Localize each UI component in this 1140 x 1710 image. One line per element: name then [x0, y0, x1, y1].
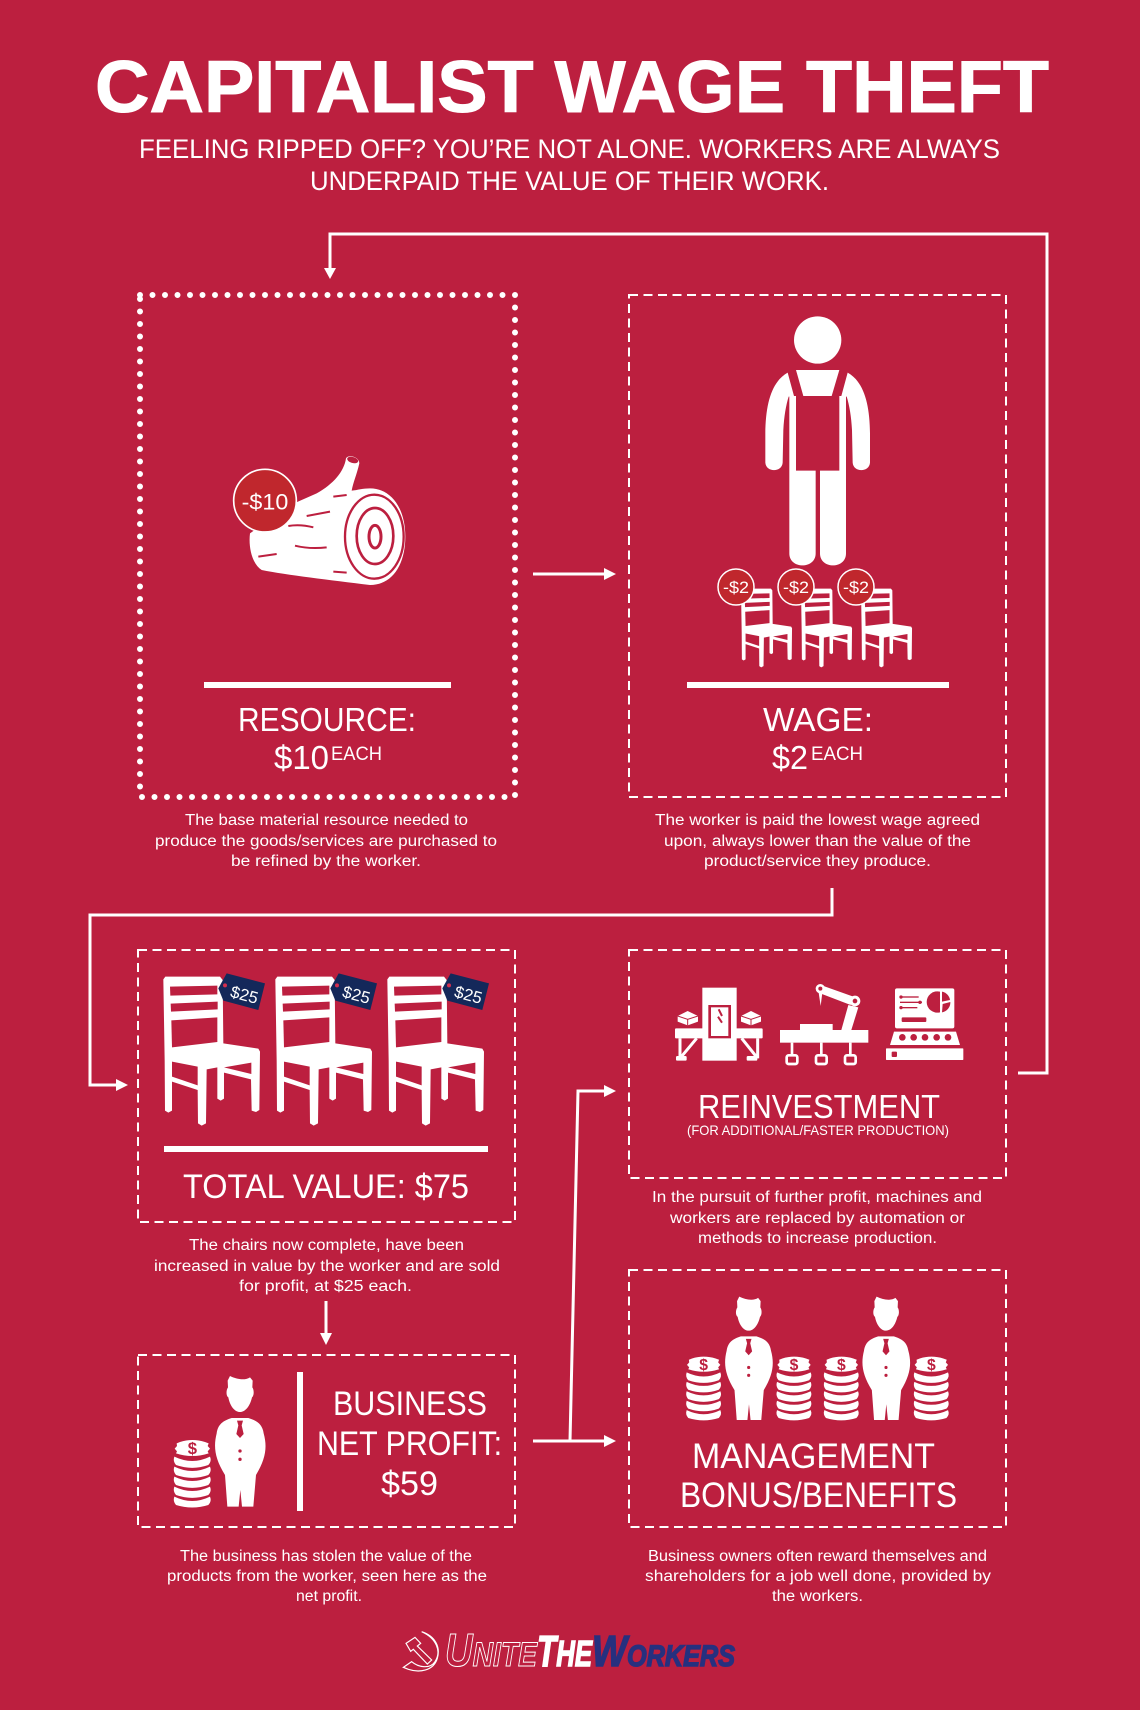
- icon: two managers with coin stacks: $: [837, 1357, 846, 1374]
- logo: Unite The Workers: WORKERS: [592, 1627, 735, 1676]
- badges: minus two dollars: -$2: [783, 578, 809, 597]
- text: total value description: for profit, at $25 each.: [239, 1278, 412, 1295]
- text: reinvestment description: workers are replaced by automation or: [669, 1210, 965, 1227]
- icon: three chairs with price tags: [163, 973, 489, 1126]
- heading: reinvestment: REINVESTMENT: [698, 1088, 940, 1125]
- logo: Unite The Workers: UNITE: [445, 1624, 538, 1676]
- text: business description: net profit.: [296, 1588, 362, 1605]
- icon: businessman with coins: $: [188, 1439, 198, 1458]
- panel: total value: [138, 950, 515, 1222]
- badges: minus two dollars: [718, 569, 874, 605]
- panel: business net profit: [138, 1355, 515, 1527]
- text: management description: shareholders for a job well done, provided by: [645, 1568, 991, 1585]
- heading: management bonus: MANAGEMENT: [692, 1437, 935, 1476]
- panel: management bonus: [629, 1270, 1006, 1527]
- text: management description: the workers.: [772, 1588, 863, 1605]
- text: business description: products from the worker, seen here as the: [167, 1568, 487, 1585]
- text: reinvestment description: In the pursuit of further profit, machines and: [652, 1189, 982, 1206]
- text: resource description: The base material resource needed to: [185, 812, 468, 829]
- arrow: wage to total value: [90, 888, 832, 1091]
- text: reinvestment description: methods to increase production.: [698, 1230, 937, 1247]
- text: wage description: [655, 812, 980, 870]
- badges: minus two dollars: -$2: [843, 578, 869, 597]
- title: CAPITALIST WAGE THEFT: [95, 47, 1049, 128]
- icon: robot arm on platform: [780, 984, 868, 1064]
- icon: three chairs with price tags: $25: [340, 982, 372, 1008]
- panel: wage: [629, 295, 1006, 797]
- text: resource description: [155, 812, 497, 870]
- heading: total value: TOTAL VALUE: $75: [183, 1168, 469, 1206]
- text: wage description: upon, always lower than the value of the: [664, 833, 971, 850]
- badges: minus two dollars: -$2: [723, 578, 749, 597]
- icon: three chairs with price tags: $25: [452, 982, 484, 1008]
- arrow: business profit to management: [533, 1435, 616, 1447]
- arrow: total value to business profit: [320, 1301, 332, 1345]
- text: total value description: The chairs now complete, have been: [189, 1237, 464, 1254]
- text: wage description: The worker is paid the lowest wage agreed: [655, 812, 980, 829]
- text: wage description: product/service they produce.: [704, 853, 931, 870]
- icon: two managers with coin stacks: $: [927, 1357, 936, 1374]
- text: resource description: be refined by the worker.: [231, 853, 421, 870]
- subheading: reinvestment: (FOR ADDITIONAL/FASTER PRODUCTION): [687, 1122, 949, 1138]
- arrow: resource to wage: [533, 568, 616, 580]
- text: total value description: [154, 1237, 500, 1295]
- logo: Unite The Workers: THE: [537, 1627, 593, 1676]
- subtitle: UNDERPAID THE VALUE OF THEIR WORK.: [310, 166, 829, 196]
- heading: business net profit: BUSINESS: [333, 1385, 487, 1423]
- heading: business net profit: NET PROFIT:: [317, 1425, 502, 1463]
- icon: businessman with coins: [174, 1376, 266, 1507]
- text: reinvestment description: [652, 1189, 982, 1247]
- heading: management bonus: BONUS/BENEFITS: [680, 1476, 957, 1515]
- icon: log with price badge: -$10: [242, 489, 288, 514]
- subtitle: FEELING RIPPED OFF? YOU’RE NOT ALONE. WORKERS ARE ALWAYS: [139, 134, 1000, 164]
- text: business description: The business has stolen the value of the: [180, 1548, 472, 1565]
- text: management description: Business owners often reward themselves and: [648, 1548, 987, 1565]
- heading: resource: RESOURCE:: [238, 701, 416, 738]
- subtitle: [139, 134, 1000, 196]
- heading: wage: WAGE:: [763, 701, 873, 738]
- icon: scanner conveyor: [675, 988, 763, 1061]
- resource price: [274, 739, 382, 776]
- resource price: $10: [274, 739, 329, 776]
- panel: resource: [140, 295, 515, 797]
- text: management description: [645, 1548, 991, 1605]
- wage price: EACH: [811, 744, 863, 765]
- icon: computer with chart: [886, 988, 963, 1060]
- text: business description: [167, 1548, 487, 1605]
- icon: hammer and sickle: [403, 1632, 438, 1671]
- icon: two managers with coin stacks: [686, 1297, 949, 1420]
- icon: log with price badge: [234, 456, 405, 585]
- resource price: EACH: [331, 744, 382, 765]
- icon: three small chairs: [741, 589, 912, 667]
- icon: three chairs with price tags: $25: [228, 982, 260, 1008]
- arrow: business profit to reinvestment: [570, 1085, 616, 1441]
- logo: Unite The Workers: [403, 1624, 735, 1676]
- icon: worker with apron: [765, 316, 870, 565]
- heading: business net profit: $59: [381, 1465, 438, 1503]
- icon: two managers with coin stacks: $: [699, 1357, 708, 1374]
- panel: reinvestment: [629, 950, 1006, 1178]
- wage price: [772, 739, 863, 776]
- heading: management bonus: [680, 1437, 957, 1515]
- text: total value description: increased in value by the worker and are sold: [154, 1258, 500, 1275]
- heading: business net profit: [317, 1385, 502, 1503]
- wage price: $2: [772, 739, 808, 776]
- text: resource description: produce the goods/services are purchased to: [155, 833, 497, 850]
- arrow: reinvestment back to resource: [324, 234, 1047, 1073]
- icon: two managers with coin stacks: $: [790, 1357, 799, 1374]
